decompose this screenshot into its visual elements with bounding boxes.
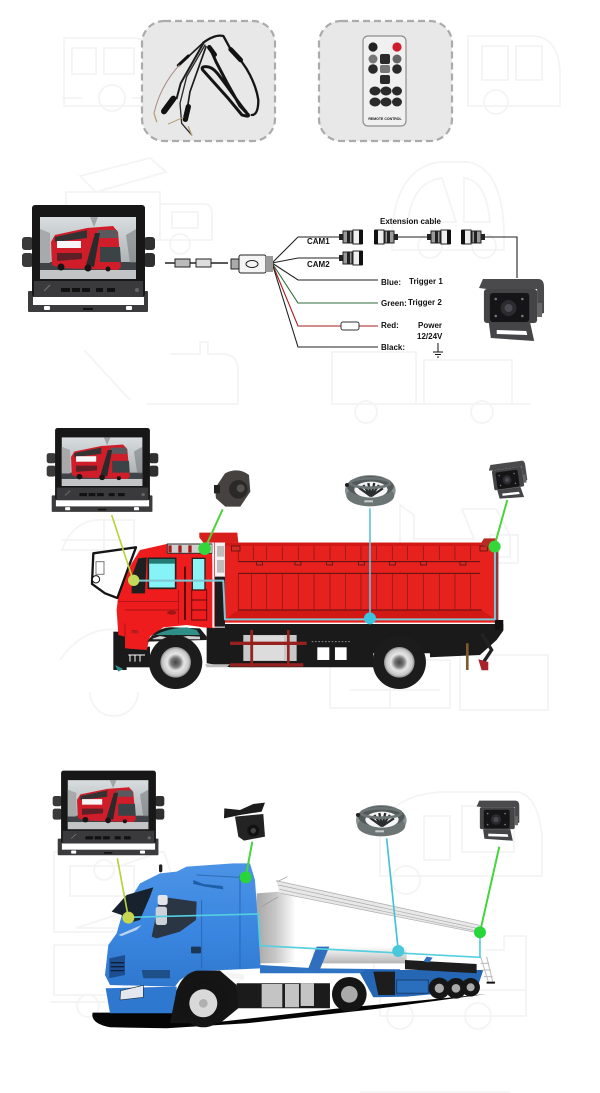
camera-side connector [461,230,485,244]
dump truck installation [47,428,530,689]
node: monitor connection [128,575,139,586]
icon: cable coil [356,805,407,836]
cable routes [117,838,499,957]
icon: monitor [47,428,158,512]
dump truck illustration [92,533,503,689]
node: rear camera connection [489,541,501,553]
icon: rear camera [477,801,519,841]
wires from monitor to junction [165,237,517,347]
label: red wire: Red: [381,321,399,330]
extension cable connector start [374,230,398,244]
icon: side camera [214,470,250,507]
label: extension cable: Extension cable [380,217,441,226]
node: cable connection [364,612,376,624]
wiring diagram [22,205,544,357]
label: blue wire: Blue: [381,278,401,287]
icon: monitor [53,771,164,855]
label: CAM1: CAM1 [307,237,330,246]
extension cable connector end [427,230,451,244]
cable routes [112,500,507,619]
label: black wire: Black: [381,343,405,352]
label: power: Power [418,321,442,330]
label: CAM2: CAM2 [307,260,330,269]
node: rear camera connection [474,926,486,938]
icon: rear camera [479,279,544,341]
icon: rear camera [488,460,530,501]
icon: small camera [224,803,265,841]
icon: ground [433,343,443,357]
connector pair [175,259,211,267]
node: cable connection [392,945,404,957]
panel: remote control accessory [319,21,452,141]
panel: cable harness accessory [142,21,275,141]
label: trigger 1: Trigger 1 [409,277,443,286]
label: voltage: 12/24V [417,332,443,341]
icon: monitor [22,205,155,312]
label: trigger 2: Trigger 2 [408,298,442,307]
label: green wire: Green: [381,299,407,308]
inline fuse [341,322,359,330]
icon: wiring harness [154,36,258,135]
node: monitor connection [122,912,134,924]
icon: remote control: REMOTE CONTROL [368,117,402,121]
icon: cable coil [345,475,396,506]
node: side camera connection [198,542,211,555]
tanker truck illustration [92,863,495,1028]
junction box [231,255,273,273]
connector: CAM2 [339,251,363,265]
node: cab camera connection [240,871,252,883]
connector: CAM1 [339,230,363,244]
tanker truck installation [53,771,519,1028]
